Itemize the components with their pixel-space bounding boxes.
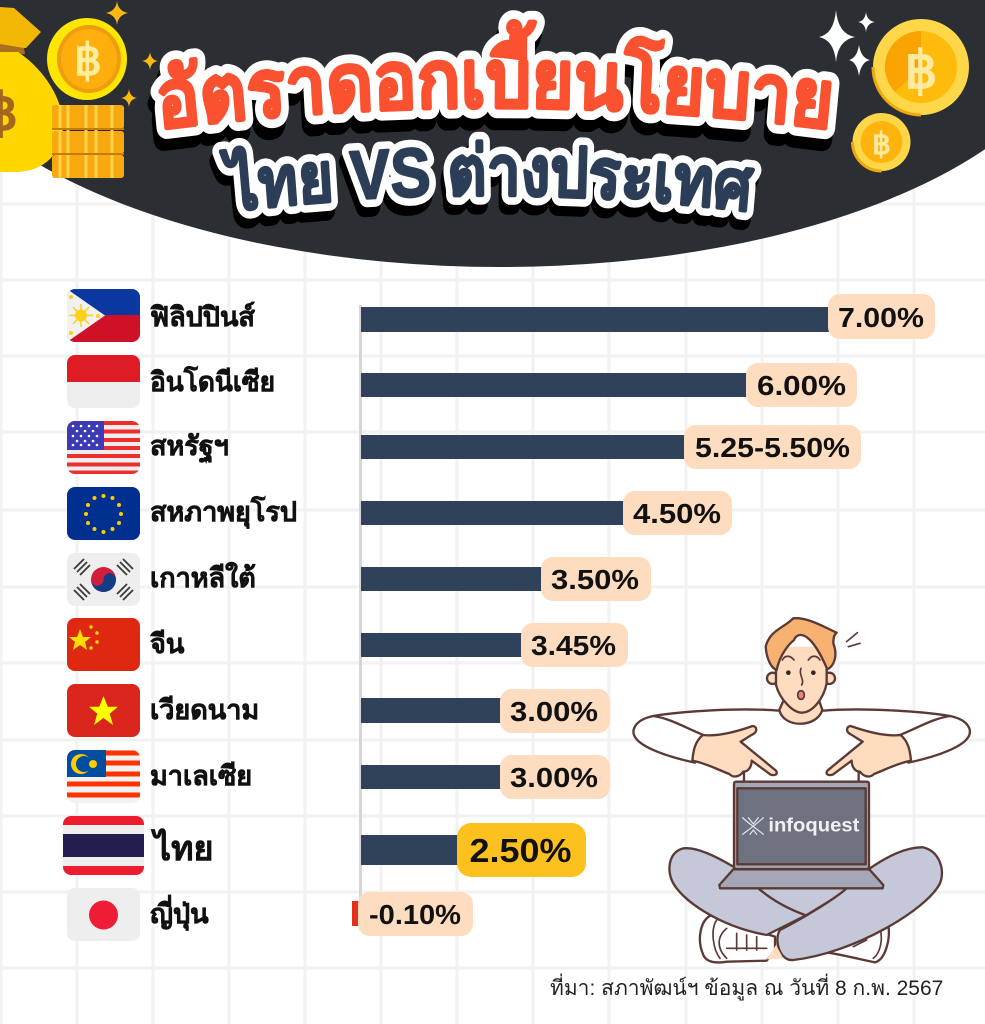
laptop logo text: infoquest bbox=[768, 816, 860, 837]
row: Japan bbox=[67, 888, 473, 941]
row: South Korea bbox=[67, 553, 651, 606]
flag: South Korea bbox=[67, 553, 140, 606]
title line 2: ไทย VS ต่างประเทศ bbox=[209, 144, 758, 230]
chart axis bbox=[359, 305, 362, 930]
icon: coin stack bbox=[52, 105, 124, 178]
value: 3.00% bbox=[500, 755, 610, 799]
value: 5.25-5.50%: 5.25-5.50% bbox=[695, 432, 850, 463]
flag: Indonesia bbox=[67, 355, 140, 408]
label: South Korea: เกาหลีใต้ bbox=[150, 562, 256, 593]
value: 4.50%: 4.50% bbox=[633, 498, 721, 529]
value: 3.00%: 3.00% bbox=[510, 762, 598, 793]
bar: South Korea bbox=[361, 567, 546, 591]
title line 2: ไทย VS ต่างประเทศ bbox=[212, 132, 762, 220]
row: Philippines bbox=[67, 289, 935, 342]
bar: Malaysia bbox=[361, 765, 506, 789]
title line 2: ไทย VS ต่างประเทศ bbox=[218, 139, 755, 213]
value: 3.50% bbox=[541, 557, 651, 601]
value: 3.45% bbox=[521, 623, 628, 667]
bar: Indonesia bbox=[361, 373, 751, 397]
value: 7.00%: 7.00% bbox=[838, 302, 924, 333]
value: 3.00%: 3.00% bbox=[510, 696, 598, 727]
header dark arc background bbox=[0, 0, 985, 267]
title line 1: อัตราดอกเบี้ยนโยบาย bbox=[150, 10, 840, 140]
icon: gold sparkles bbox=[106, 1, 158, 107]
value: 3.45%: 3.45% bbox=[531, 630, 616, 661]
face details bbox=[786, 670, 791, 675]
bar: Vietnam bbox=[361, 698, 506, 723]
row: Thailand bbox=[63, 816, 586, 877]
label: Philippines: ฟิลิปปินส์ bbox=[150, 301, 255, 332]
neck and head bbox=[779, 693, 822, 724]
label: Japan: ญี่ปุ่น bbox=[150, 894, 209, 931]
value: 7.00% bbox=[828, 294, 935, 339]
value: 5.25-5.50% bbox=[684, 425, 861, 469]
row: Indonesia bbox=[67, 355, 857, 408]
value: 2.50%: 2.50% bbox=[470, 832, 572, 869]
icon: small coin right: ฿ bbox=[872, 128, 891, 161]
bar: Thailand bbox=[361, 835, 461, 865]
bar: United States bbox=[361, 435, 689, 459]
bar: Japan negative bbox=[352, 901, 359, 926]
icon: bitcoin-style coin left bbox=[47, 18, 127, 100]
row: European Union bbox=[67, 487, 732, 540]
icon: small coin right bbox=[852, 113, 910, 171]
value: 4.50% bbox=[623, 491, 732, 535]
value: 3.00% bbox=[500, 689, 610, 733]
flag: European Union bbox=[67, 487, 140, 540]
title line 1: อัตราดอกเบี้ยนโยบาย bbox=[158, 19, 832, 130]
value: 3.50%: 3.50% bbox=[551, 564, 639, 595]
flag: Thailand bbox=[63, 816, 144, 875]
icon: large coin right bbox=[873, 19, 969, 115]
row: Malaysia bbox=[67, 750, 610, 803]
flag: United States bbox=[67, 421, 140, 474]
title line 1: อัตราดอกเบี้ยนโยบาย bbox=[148, 29, 833, 152]
illustration: person pointing at laptop bbox=[633, 618, 970, 962]
value: 2.50% bbox=[457, 823, 586, 877]
row: United States bbox=[67, 421, 861, 474]
flag: Malaysia bbox=[67, 750, 140, 803]
value: 6.00%: 6.00% bbox=[757, 370, 846, 401]
icon: large coin right: ฿ bbox=[904, 42, 938, 100]
label: Malaysia: มาเลเซีย bbox=[150, 761, 252, 791]
bar: China bbox=[361, 633, 526, 657]
laptop bbox=[744, 772, 859, 782]
icon: money bag bbox=[0, 7, 63, 172]
value: 6.00% bbox=[746, 363, 857, 407]
flag: Philippines bbox=[67, 289, 140, 342]
shirt bbox=[633, 709, 970, 787]
source note: ที่มา: สภาพัฒน์ฯ ข้อมูล ณ วันที่ 8 ก.พ. 2567 bbox=[550, 973, 943, 1001]
flag: Japan bbox=[67, 888, 140, 941]
bar: European Union bbox=[361, 501, 627, 525]
hair bbox=[766, 618, 837, 670]
shoes bbox=[700, 915, 775, 962]
icon: bitcoin-style coin left: ฿ bbox=[74, 36, 102, 85]
value: -0.10%: -0.10% bbox=[369, 899, 461, 930]
flag: China bbox=[67, 618, 140, 672]
flag: Vietnam bbox=[67, 684, 140, 737]
value: -0.10% bbox=[358, 892, 473, 936]
row: China bbox=[67, 618, 628, 672]
legs bbox=[669, 848, 853, 935]
label: Thailand: ไทย bbox=[151, 828, 213, 868]
label: China: จีน bbox=[150, 629, 185, 659]
label: Indonesia: อินโดนีเซีย bbox=[150, 365, 275, 397]
icon: white sparkles bbox=[819, 10, 875, 76]
label: Vietnam: เวียดนาม bbox=[150, 695, 259, 725]
label: United States: สหรัฐฯ bbox=[150, 431, 229, 464]
label: European Union: สหภาพยุโรป bbox=[150, 495, 297, 529]
bar: Philippines bbox=[361, 307, 831, 332]
hands bbox=[692, 726, 777, 776]
row: Vietnam bbox=[67, 684, 610, 737]
